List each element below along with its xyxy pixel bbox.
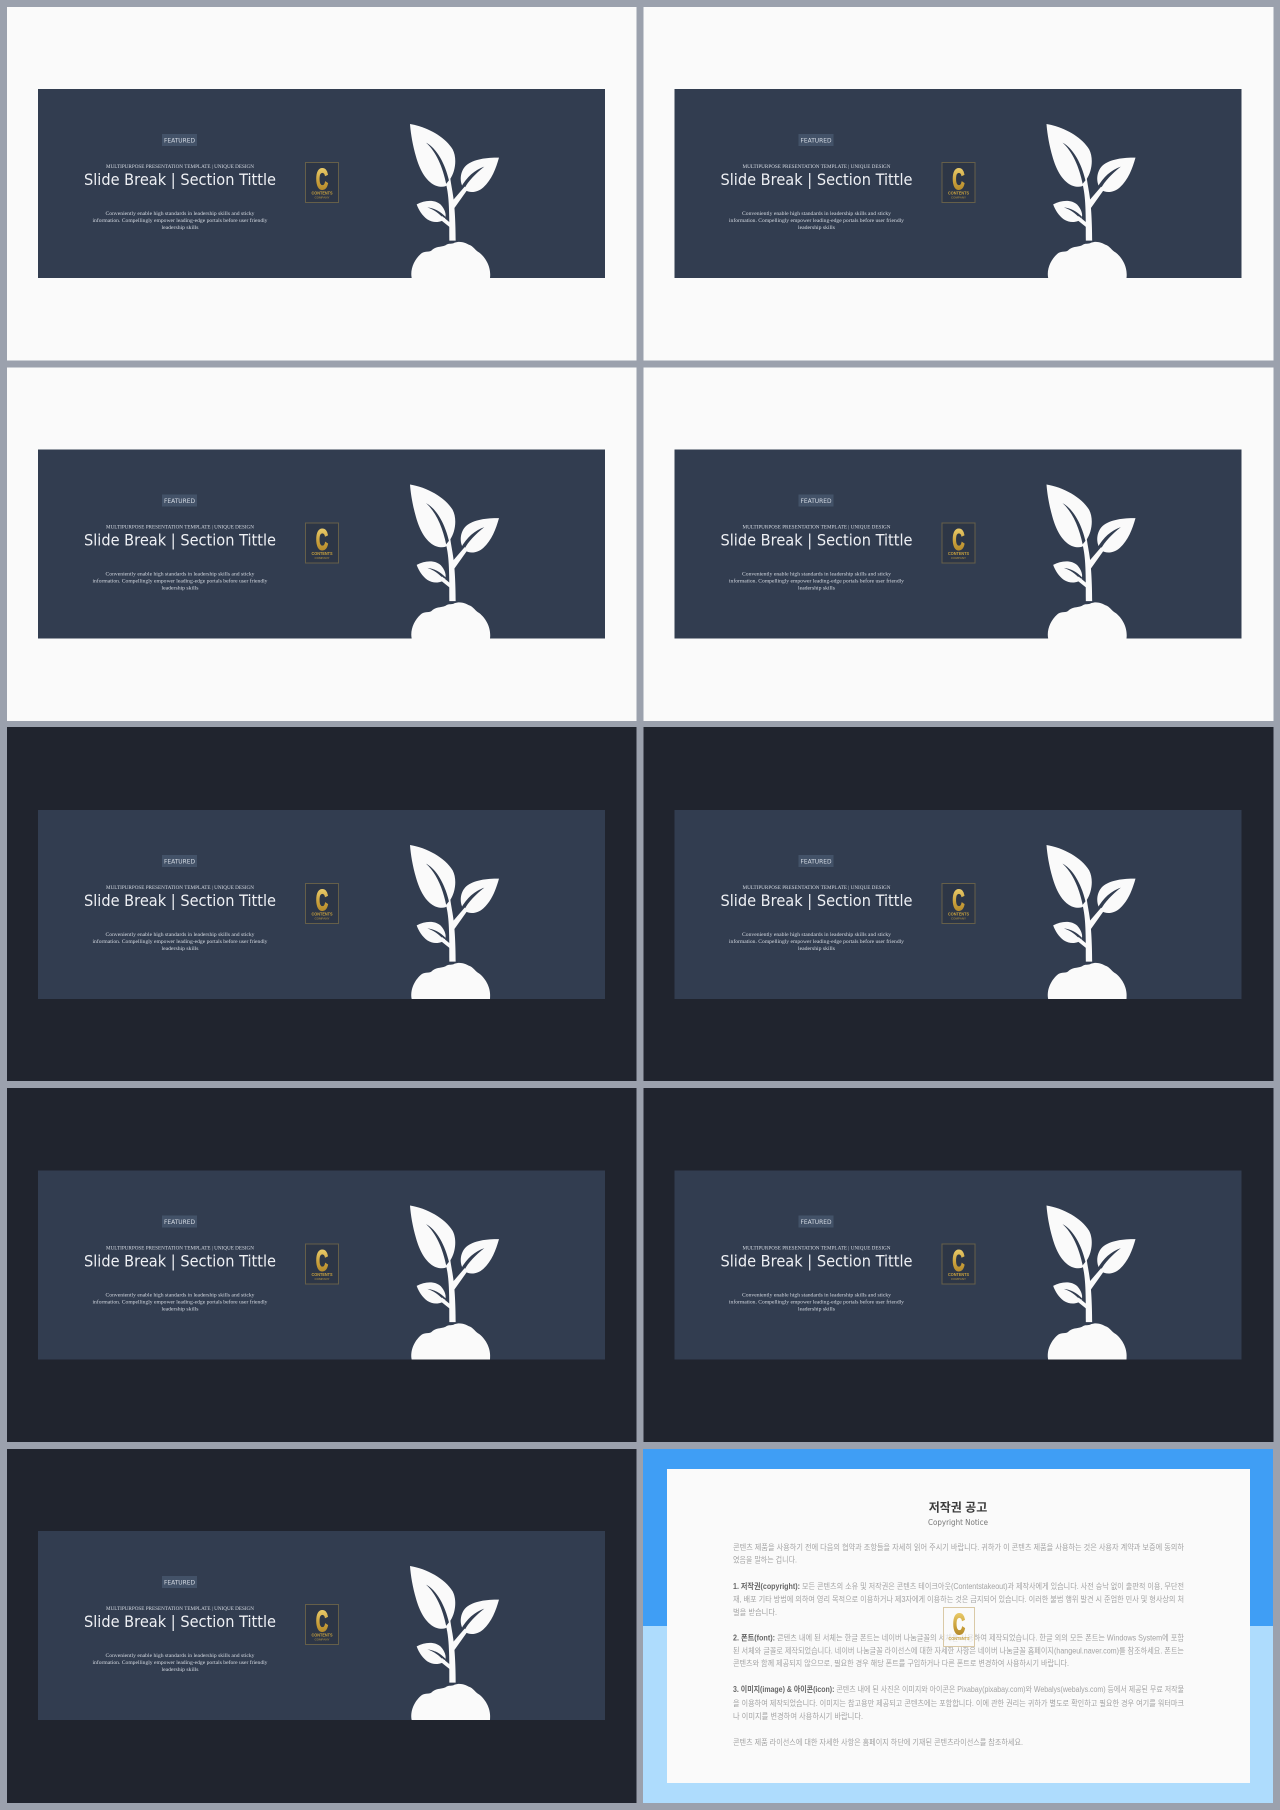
kicker: MULTIPURPOSE PRESENTATION TEMPLATE | UNIQUE DESIGN	[742, 1246, 890, 1252]
kicker: MULTIPURPOSE PRESENTATION TEMPLATE | UNIQUE DESIGN	[106, 524, 254, 530]
notice section 3 image and icon: 3. 이미지(image) & 아이콘(icon): 콘텐츠 내에 된 사진은 이미지와 아이콘은 Pixabay(pixabay.com)와 Webalys(webalys.com) 등에서 제공된 무료 저작물	[733, 1684, 1184, 1694]
panel: slide 7 dark	[7, 1088, 636, 1442]
description	[729, 211, 904, 231]
title: Slide Break | Section Tittle	[84, 892, 276, 910]
description	[92, 1292, 268, 1312]
description: Conveniently enable high standards in leadership skills and sticky	[742, 572, 891, 578]
panel: slide 1 light	[7, 7, 636, 360]
logo: contents: C	[316, 885, 328, 917]
icon: sprout	[410, 1566, 499, 1720]
description: leadership skills	[162, 225, 198, 231]
title: Slide Break | Section Tittle	[720, 171, 912, 189]
description: Conveniently enable high standards in leadership skills and sticky	[742, 211, 891, 217]
title: Slide Break | Section Tittle	[84, 1252, 276, 1270]
badge: featured: FEATURED	[800, 1219, 832, 1226]
icon: sprout	[410, 1206, 499, 1360]
kicker: MULTIPURPOSE PRESENTATION TEMPLATE | UNIQUE DESIGN	[742, 885, 890, 891]
notice heading: 저작권 공고	[929, 1500, 987, 1514]
logo: contents	[942, 1244, 975, 1284]
panel: slide 8 dark	[644, 1088, 1274, 1442]
notice section 3 image and icon: 을 이용하여 제작되었습니다. 이미지는 참고용만 제공되고 콘텐츠에는 포함합니다. 이에 관한 권리는 귀하가 별도로 확인하고 필요한 경우 여기를 워터마크	[733, 1698, 1184, 1708]
description: leadership skills	[162, 946, 198, 952]
icon: sprout	[1046, 1206, 1136, 1360]
description: Conveniently enable high standards in leadership skills and sticky	[106, 572, 255, 578]
title: Slide Break | Section Tittle	[84, 532, 276, 550]
description: information. Compellingly empower leading-edge portals before user friendly	[92, 938, 268, 945]
logo: contents: C	[316, 164, 328, 196]
notice intro: 콘텐츠 제품을 사용하기 전에 다음의 협약과 조항들을 자세히 읽어 주시기 바랍니다. 귀하가 이 콘텐츠 제품을 사용하는 것은 사용자 계약과 보증에 동의하	[733, 1542, 1185, 1552]
logo: contents: CONTENTS	[948, 912, 969, 916]
description: information. Compellingly empower leading-edge portals before user friendly	[729, 217, 904, 224]
description: Conveniently enable high standards in leadership skills and sticky	[106, 211, 255, 217]
description: leadership skills	[798, 225, 835, 231]
description: leadership skills	[162, 1667, 198, 1673]
icon: sprout	[1046, 124, 1136, 278]
description: leadership skills	[798, 1306, 835, 1312]
panel: slide 2 light	[644, 7, 1274, 360]
badge: featured: FEATURED	[800, 137, 832, 144]
description: information. Compellingly empower leading-edge portals before user friendly	[92, 578, 268, 584]
logo: contents: C	[316, 1606, 328, 1638]
kicker: MULTIPURPOSE PRESENTATION TEMPLATE | UNIQUE DESIGN	[106, 1246, 254, 1252]
icon: sprout	[1046, 484, 1136, 638]
logo: contents	[306, 1244, 338, 1284]
description: leadership skills	[798, 946, 835, 952]
notice footer: 콘텐츠 제품 라이선스에 대한 자세한 사항은 홈페이지 하단에 기재된 콘텐츠라이선스를 참조하세요.	[733, 1737, 1023, 1747]
banner	[38, 810, 605, 999]
description	[92, 932, 268, 952]
notice section 2 font: 2. 폰트(font): 콘텐츠 내에 된 서체는 한글 폰트는 네이버 나눔글꼴의 서체를 사용하여 제작되었습니다. 한글 외의 모든 폰트는 Windows System에 포함	[733, 1632, 1185, 1642]
notice subheading: Copyright Notice	[928, 1518, 988, 1527]
kicker: MULTIPURPOSE PRESENTATION TEMPLATE | UNIQUE DESIGN	[742, 164, 890, 170]
kicker: MULTIPURPOSE PRESENTATION TEMPLATE | UNIQUE DESIGN	[742, 524, 890, 530]
badge: featured	[162, 1576, 197, 1588]
title: Slide Break | Section Tittle	[720, 892, 912, 910]
description	[729, 932, 904, 952]
title: Slide Break | Section Tittle	[84, 1613, 276, 1631]
panel: slide 9 dark	[7, 1449, 636, 1803]
badge: featured: FEATURED	[164, 1219, 195, 1226]
logo: contents: CONTENTS	[948, 1272, 969, 1277]
badge: featured	[162, 1216, 197, 1228]
logo: contents: C	[952, 885, 965, 917]
logo: contents: CONTENTS	[312, 1632, 332, 1638]
logo: contents: COMPANY	[314, 556, 330, 560]
description	[729, 572, 904, 592]
kicker: MULTIPURPOSE PRESENTATION TEMPLATE | UNIQUE DESIGN	[106, 164, 254, 170]
badge: featured	[798, 134, 834, 146]
description: information. Compellingly empower leading-edge portals before user friendly	[92, 1659, 268, 1666]
badge: featured	[162, 855, 197, 867]
logo: watermark: C	[953, 1609, 965, 1641]
badge: featured	[798, 855, 834, 867]
badge: featured: FEATURED	[164, 498, 195, 505]
panel: slide 5 dark	[7, 727, 636, 1081]
logo: contents: COMPANY	[314, 196, 330, 200]
logo: watermark: CONTENTS	[948, 1636, 970, 1641]
notice section 1 copyright: 1. 저작권(copyright): 모든 콘텐츠의 소유 및 저작권은 콘텐츠 테이크아웃(Contentstakeout)과 제작사에게 있습니다. 사전 승낙 없이 출판적 이용, 무단전	[733, 1581, 1184, 1591]
badge: featured	[798, 1216, 834, 1228]
notice section 2 font: 콘텐츠와 함께 제공되지 않으므로, 필요한 경우 해당 폰트를 구입하거나 다른 폰트로 변경하여 사용하시기 바랍니다.	[733, 1658, 1069, 1668]
badge: featured: FEATURED	[164, 137, 195, 144]
logo: contents	[942, 162, 975, 202]
panel: copyright notice	[643, 1449, 1273, 1803]
logo: contents: COMPANY	[951, 556, 966, 560]
logo: contents	[306, 884, 338, 924]
logo: contents	[942, 523, 975, 563]
logo: contents: CONTENTS	[948, 190, 969, 196]
panel: slide 6 dark	[644, 727, 1274, 1081]
icon: sprout	[410, 484, 499, 638]
logo: contents: COMPANY	[951, 196, 966, 200]
badge: featured	[162, 494, 197, 506]
notice intro	[733, 1542, 1185, 1564]
description: information. Compellingly empower leading-edge portals before user friendly	[729, 578, 904, 584]
description: Conveniently enable high standards in leadership skills and sticky	[742, 1292, 891, 1298]
logo: contents: CONTENTS	[312, 551, 332, 556]
logo: contents	[306, 523, 338, 563]
description	[92, 1653, 268, 1673]
logo: contents: COMPANY	[951, 916, 966, 920]
logo: contents	[306, 1604, 338, 1644]
logo: contents: COMPANY	[314, 916, 330, 920]
notice section 1 copyright: 재, 배포 기타 방법에 의하여 영리 목적으로 이용하거나 제3자에게 이용하는 것은 금지되어 있습니다. 이러한 불법 행위 발견 시 준엄한 민사 및 형사상의 처	[733, 1594, 1184, 1604]
description: Conveniently enable high standards in leadership skills and sticky	[106, 1653, 255, 1659]
logo: contents: COMPANY	[314, 1277, 330, 1281]
notice section 3 image and icon: 나 이미지를 변경하여 사용하시기 바랍니다.	[733, 1711, 863, 1721]
description: Conveniently enable high standards in leadership skills and sticky	[742, 932, 891, 938]
icon: sprout	[410, 124, 499, 278]
badge: featured: FEATURED	[800, 858, 832, 865]
notice section 2 font: 된 서체와 글꼴로 제작되었습니다. 네이버 나눔글꼴 라이선스에 대한 자세한 사항은 네이버 나눔글꼴 홈페이지(hangeul.naver.com)를 참조하세요. 폰트는	[733, 1646, 1184, 1656]
description: Conveniently enable high standards in leadership skills and sticky	[106, 932, 255, 938]
logo: contents: CONTENTS	[948, 551, 969, 556]
banner	[674, 1170, 1242, 1360]
notice section 1 copyright: 벌을 받습니다.	[733, 1607, 777, 1617]
description: information. Compellingly empower leading-edge portals before user friendly	[729, 938, 904, 945]
description: Conveniently enable high standards in leadership skills and sticky	[106, 1292, 255, 1298]
badge: featured	[162, 134, 197, 146]
title: Slide Break | Section Tittle	[720, 532, 912, 550]
description	[92, 211, 268, 231]
panel: slide 3 light	[7, 368, 636, 721]
description	[92, 572, 268, 592]
badge: featured: FEATURED	[800, 498, 832, 505]
banner	[674, 450, 1242, 638]
logo: watermark	[944, 1608, 974, 1646]
notice card	[667, 1469, 1250, 1783]
logo: contents: CONTENTS	[312, 912, 332, 916]
badge: featured: FEATURED	[164, 1579, 195, 1586]
description: leadership skills	[162, 1306, 198, 1312]
banner	[674, 810, 1242, 999]
logo: contents	[942, 884, 975, 924]
description: information. Compellingly empower leading-edge portals before user friendly	[729, 1298, 904, 1306]
icon: sprout	[1046, 845, 1136, 999]
notice section 3 image and icon	[733, 1684, 1184, 1721]
description: leadership skills	[798, 586, 835, 592]
banner	[38, 450, 605, 638]
notice intro: 였음을 말하는 겁니다.	[733, 1554, 797, 1564]
logo: contents: COMPANY	[314, 1638, 330, 1642]
logo: contents: CONTENTS	[312, 190, 332, 196]
badge: featured: FEATURED	[164, 858, 195, 865]
description	[729, 1292, 904, 1312]
logo: contents: C	[952, 164, 965, 196]
banner	[38, 1170, 605, 1360]
title: Slide Break | Section Tittle	[84, 171, 276, 189]
notice section 2 font	[733, 1632, 1185, 1668]
logo: contents: C	[316, 1246, 328, 1278]
description: leadership skills	[162, 586, 198, 592]
logo: contents: C	[952, 1246, 965, 1278]
logo: contents: COMPANY	[951, 1277, 966, 1281]
panel: slide 4 light	[644, 368, 1274, 721]
kicker: MULTIPURPOSE PRESENTATION TEMPLATE | UNIQUE DESIGN	[106, 1606, 254, 1612]
banner	[674, 89, 1242, 278]
notice section 1 copyright	[733, 1581, 1184, 1617]
kicker: MULTIPURPOSE PRESENTATION TEMPLATE | UNIQUE DESIGN	[106, 885, 254, 891]
banner	[38, 1531, 605, 1720]
logo: contents: C	[952, 524, 965, 556]
icon: sprout	[410, 845, 499, 999]
description: information. Compellingly empower leading-edge portals before user friendly	[92, 1298, 268, 1306]
badge: featured	[798, 494, 834, 506]
description: information. Compellingly empower leading-edge portals before user friendly	[92, 217, 268, 224]
logo: contents	[306, 162, 338, 202]
title: Slide Break | Section Tittle	[720, 1252, 912, 1270]
banner	[38, 89, 605, 278]
logo: contents: C	[316, 524, 328, 556]
logo: contents: CONTENTS	[312, 1272, 332, 1277]
